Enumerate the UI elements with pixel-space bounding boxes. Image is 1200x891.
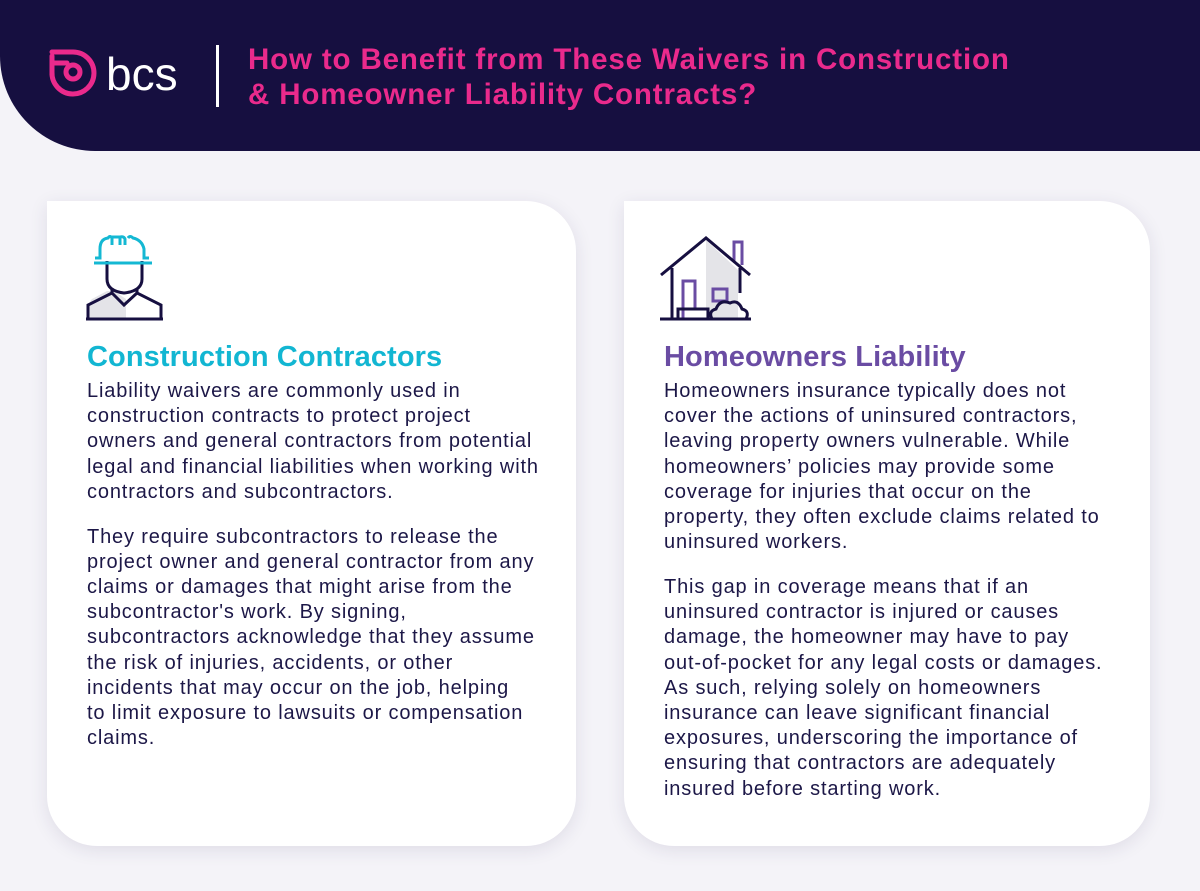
body text: property, they often exclude claims related to — [664, 506, 1100, 528]
body text: As such, relying solely on homeowners — [664, 677, 1041, 699]
body text: claims. — [87, 727, 155, 749]
body text: out-of-pocket for any legal costs or damages. — [664, 652, 1102, 674]
body text: contractors and subcontractors. — [87, 481, 394, 503]
body text: Homeowners insurance typically does not — [664, 380, 1066, 402]
body text: incidents that may occur on the job, helping — [87, 677, 509, 699]
body text: leaving property owners vulnerable. While — [664, 430, 1070, 452]
header banner — [0, 0, 1200, 151]
body text: exposures, underscoring the importance of — [664, 727, 1078, 749]
title: & Homeowner Liability Contracts? — [248, 78, 757, 111]
divider — [216, 45, 219, 107]
body text: the risk of injuries, accidents, or other — [87, 652, 453, 674]
title — [248, 43, 1010, 111]
body text: to limit exposure to lawsuits or compensation — [87, 702, 523, 724]
logo — [50, 48, 178, 100]
heading: Construction Contractors — [87, 341, 442, 373]
panel: homeowners liability — [624, 201, 1150, 846]
logo: bcs — [106, 48, 178, 100]
body text: Liability waivers are commonly used in — [87, 380, 461, 402]
body text: legal and financial liabilities when working with — [87, 456, 539, 478]
title: How to Benefit from These Waivers in Construction — [248, 43, 1010, 76]
heading: Homeowners Liability — [664, 341, 966, 373]
body text: uninsured contractor is injured or causes — [664, 601, 1059, 623]
body text: subcontractor's work. By signing, — [87, 601, 407, 623]
body text: construction contracts to protect project — [87, 405, 471, 427]
icon: house — [660, 236, 751, 320]
body text: coverage for injuries that occur on the — [664, 481, 1032, 503]
body text: cover the actions of uninsured contractors, — [664, 405, 1077, 427]
body text: insurance can leave significant financial — [664, 702, 1050, 724]
body text: This gap in coverage means that if an — [664, 576, 1029, 598]
body text — [664, 380, 1102, 800]
body text: uninsured workers. — [664, 531, 848, 553]
body text: homeowners’ policies may provide some — [664, 456, 1055, 478]
body text — [87, 380, 539, 749]
panel: construction contractors — [47, 201, 576, 846]
body text: owners and general contractors from potential — [87, 430, 532, 452]
body text: insured before starting work. — [664, 778, 941, 800]
body text: ensuring that contractors are adequately — [664, 752, 1056, 774]
body text: subcontractors acknowledge that they assume — [87, 626, 535, 648]
body text: claims or damages that might arise from the — [87, 576, 513, 598]
icon: construction worker — [86, 235, 163, 320]
body text: damage, the homeowner may have to pay — [664, 626, 1069, 648]
body text: project owner and general contractor from any — [87, 551, 534, 573]
body text: They require subcontractors to release the — [87, 526, 498, 548]
